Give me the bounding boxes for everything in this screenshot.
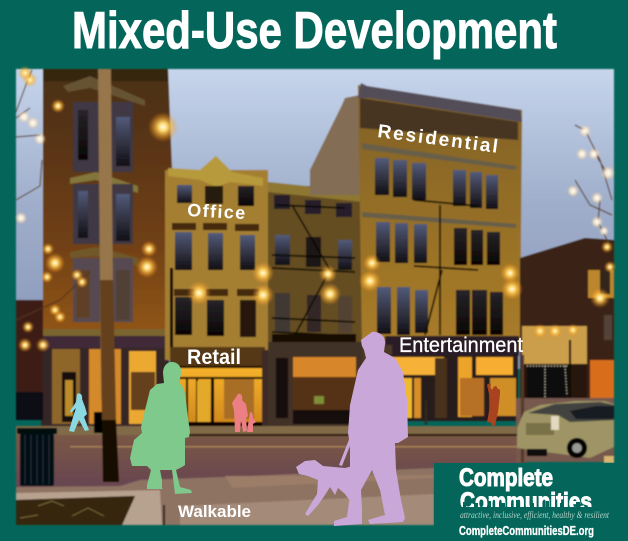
- logo panel: Complete Communities: [434, 463, 628, 541]
- leash: [339, 437, 353, 466]
- label: Walkable: Walkable: [178, 502, 251, 521]
- logo word: Complete: Complete: [459, 464, 553, 492]
- figure: cyan pedestrian: [69, 393, 89, 432]
- figure: pink pedestrians: [232, 394, 256, 432]
- street and sidewalks: [16, 398, 614, 525]
- residential building: [358, 83, 522, 356]
- label: Retail: Retail: [187, 346, 241, 369]
- sky: [16, 69, 614, 369]
- label: Office: Office: [187, 200, 246, 223]
- planter: [16, 490, 165, 525]
- middle storefront: [268, 342, 362, 426]
- parked car: [517, 401, 614, 463]
- dog: [296, 460, 360, 516]
- right brick building: [520, 238, 614, 400]
- retail storefront: [170, 347, 274, 426]
- parking meter and street sign pole: [425, 355, 524, 463]
- office building: [165, 156, 268, 360]
- fire escape: [272, 205, 355, 336]
- utility pole: [98, 69, 119, 482]
- figure: lilac man with dog: [296, 332, 408, 526]
- left corner tower building: [34, 69, 172, 350]
- residential building side wall: [310, 95, 365, 195]
- man: [334, 332, 408, 526]
- entertainment storefront: [362, 345, 518, 427]
- trash can: [17, 428, 57, 486]
- label: Residential: Residential: [376, 121, 499, 158]
- logo word: Communities with skyline cut: Communities: [460, 488, 592, 516]
- figure: green woman with bag: [130, 362, 192, 494]
- middle building: [268, 182, 362, 361]
- fire escape: [414, 200, 478, 335]
- string lights: [15, 66, 616, 352]
- figure: red pedestrian: [487, 384, 500, 426]
- label: Entertainment: Entertainment: [399, 334, 523, 357]
- right low storefront: [522, 326, 587, 402]
- far left building: [16, 300, 43, 392]
- small trash can behind: [94, 412, 104, 433]
- parked cars left: [16, 392, 43, 420]
- tree branches: [16, 70, 612, 320]
- left storefront: [41, 348, 169, 428]
